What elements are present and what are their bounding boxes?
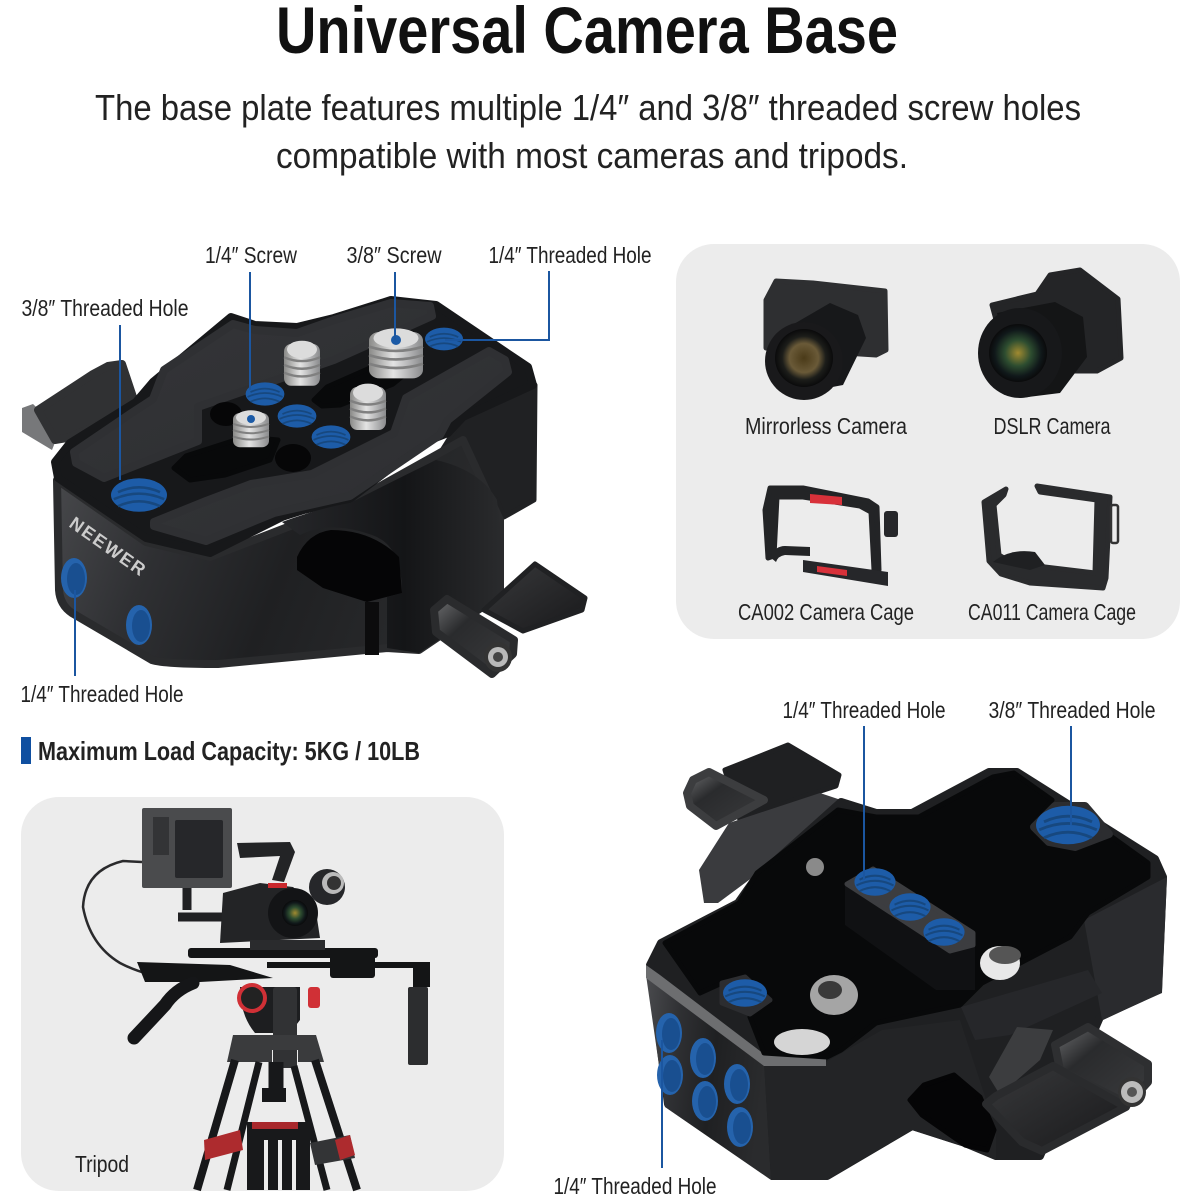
center block top xyxy=(847,869,973,951)
hole: 1/4 center xyxy=(278,404,316,428)
text: mirrorless camera: Mirrorless Camera xyxy=(745,413,907,439)
callouts: underside xyxy=(662,726,1071,1168)
clamp hump xyxy=(282,460,504,653)
photo: underside of base plate xyxy=(646,745,1167,1180)
hole: side right xyxy=(126,605,152,645)
silver screw xyxy=(774,1029,830,1055)
spreader xyxy=(247,1122,310,1190)
screw 1/4 right xyxy=(350,384,386,430)
label: 1/4 screw: 1/4″ Screw xyxy=(205,242,297,268)
center grip xyxy=(273,987,297,1068)
label: 1/4 threaded hole right: 1/4″ Threaded Hole xyxy=(782,697,946,723)
label: 1/4 threaded hole bottom: 1/4″ Threaded Hole xyxy=(20,681,184,707)
marker: load capacity xyxy=(21,737,31,764)
hole: 3/8 front left xyxy=(111,478,167,512)
center block front xyxy=(845,885,975,990)
hex screw xyxy=(810,975,858,1015)
hole: 1/4 top center xyxy=(246,382,284,406)
icon: CA002 camera cage xyxy=(765,488,898,586)
label: 1/4 threaded hole: 1/4″ Threaded Hole xyxy=(488,242,652,268)
chamfer strip xyxy=(646,965,826,1066)
knob xyxy=(434,564,585,674)
monitor xyxy=(142,808,232,888)
text: CA002 camera cage: CA002 Camera Cage xyxy=(738,599,914,625)
panel: compatible cameras xyxy=(676,244,1180,639)
monitor arm xyxy=(178,888,222,917)
front clamp xyxy=(989,1027,1053,1095)
camera xyxy=(220,842,345,943)
screw 1/4 back xyxy=(284,341,320,386)
slit xyxy=(365,602,379,655)
label: 1/4 threaded hole lower: 1/4″ Threaded Hole xyxy=(554,1173,716,1199)
photo: tripod rig xyxy=(83,808,430,1190)
callouts: top view xyxy=(75,271,549,676)
hole: left xyxy=(723,979,767,1007)
tripod legs xyxy=(197,1060,357,1190)
label: 3/8 threaded hole: 3/8″ Threaded Hole xyxy=(22,295,188,321)
hole: 3/8 top right xyxy=(425,328,463,350)
photo: top view of base plate xyxy=(22,300,585,674)
top face xyxy=(55,300,533,553)
pad: upper left xyxy=(74,303,432,478)
leg clamps xyxy=(204,1130,355,1165)
icon: DSLR camera xyxy=(978,270,1121,398)
right grip xyxy=(408,987,428,1065)
pin xyxy=(806,858,824,876)
panel: tripod xyxy=(21,797,504,1191)
dark hole lower xyxy=(275,444,311,472)
text: tripod: Tripod xyxy=(75,1151,129,1177)
hole: 1/4 right xyxy=(312,425,350,449)
front face xyxy=(764,1020,996,1180)
holes: side grid xyxy=(656,1013,753,1147)
left ledge xyxy=(722,977,770,1014)
brand: NEEWER xyxy=(66,513,149,580)
through hole rim xyxy=(989,946,1021,964)
label: 3/8 threaded hole right: 3/8″ Threaded Hole xyxy=(988,697,1156,723)
slot left xyxy=(174,437,278,480)
cavity xyxy=(665,773,1148,1057)
rear clamp xyxy=(699,793,841,903)
screw 3/8 xyxy=(369,328,423,378)
rod hole xyxy=(910,1075,994,1150)
screw dot left xyxy=(247,415,255,423)
hole: 3/8 corner xyxy=(1036,806,1100,844)
pad: lower right xyxy=(154,351,508,541)
text: DSLR camera: DSLR Camera xyxy=(994,413,1111,439)
text: CA011 camera cage: CA011 Camera Cage xyxy=(968,599,1136,625)
subtitle xyxy=(95,87,1081,176)
hole: side left xyxy=(61,558,87,598)
heading: load capacity: Maximum Load Capacity: 5KG / 10LB xyxy=(38,736,420,766)
corner ledge xyxy=(1034,806,1109,847)
right side face xyxy=(436,385,535,517)
rear knob wing xyxy=(725,745,839,820)
screw dot right xyxy=(391,335,401,345)
subtitle: compatible with most cameras and tripods. xyxy=(276,135,908,176)
right face xyxy=(1084,877,1167,1020)
rod hole xyxy=(297,530,402,602)
fluid head xyxy=(237,983,320,1033)
screw 1/4 left xyxy=(233,410,269,447)
icon: CA011 camera cage xyxy=(984,486,1118,588)
knob xyxy=(986,1027,1148,1151)
lever rear xyxy=(38,364,134,440)
hex socket xyxy=(818,981,842,999)
rails and brackets xyxy=(137,940,430,987)
cable xyxy=(83,861,173,978)
rear knob barrel xyxy=(687,772,764,826)
dark hole upper xyxy=(210,402,242,426)
lever rod xyxy=(22,404,60,450)
body side xyxy=(57,440,500,664)
through hole xyxy=(980,946,1020,980)
tripod bowl xyxy=(227,1035,324,1062)
subtitle: The base plate features multiple 1/4″ and 3/8″ threaded screw holes xyxy=(95,87,1081,128)
icon: mirrorless camera xyxy=(765,281,886,400)
holes: block row xyxy=(854,868,965,946)
side face xyxy=(646,975,771,1180)
slot right xyxy=(314,357,410,406)
outer body xyxy=(650,772,1163,1176)
strap xyxy=(961,970,1102,1040)
label: 3/8 screw: 3/8″ Screw xyxy=(346,242,442,268)
pan handle xyxy=(134,983,193,1038)
